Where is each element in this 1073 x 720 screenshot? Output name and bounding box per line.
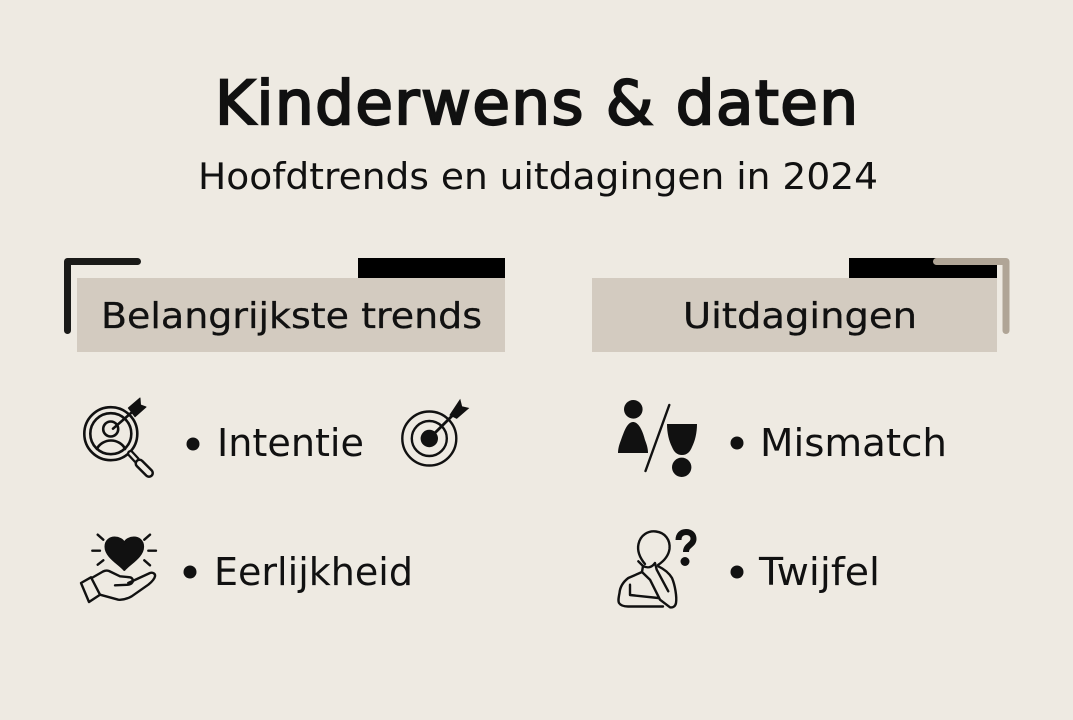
corner bracket left [68, 262, 138, 330]
label: twijfel: Twijfel [758, 550, 880, 594]
bullet: mismatch [730, 436, 744, 450]
label: mismatch: Mismatch [760, 421, 947, 465]
icon: thinking person with question mark [618, 531, 694, 607]
title: Kinderwens & daten [215, 68, 858, 139]
heading: belangrijkste trends: Belangrijkste trends [101, 296, 482, 337]
icon: mismatch figures [618, 400, 697, 477]
label: eerlijkheid: Eerlijkheid [214, 550, 413, 594]
icon: magnifier with person and arrow [84, 398, 149, 473]
corner bracket right [936, 262, 1006, 330]
subtitle: Hoofdtrends en uitdagingen in 2024 [198, 155, 878, 198]
icon: heart on open hand [81, 535, 156, 602]
icon: target with arrow [402, 400, 468, 466]
label: intentie: Intentie [217, 421, 364, 465]
bullet: eerlijkheid [184, 566, 196, 578]
panel: uitdagingen header [592, 258, 1006, 352]
heading: uitdagingen: Uitdagingen [683, 296, 917, 337]
bullet: intentie [186, 438, 200, 450]
bullet: twijfel [730, 566, 744, 578]
panel: belangrijkste trends header [68, 258, 505, 352]
